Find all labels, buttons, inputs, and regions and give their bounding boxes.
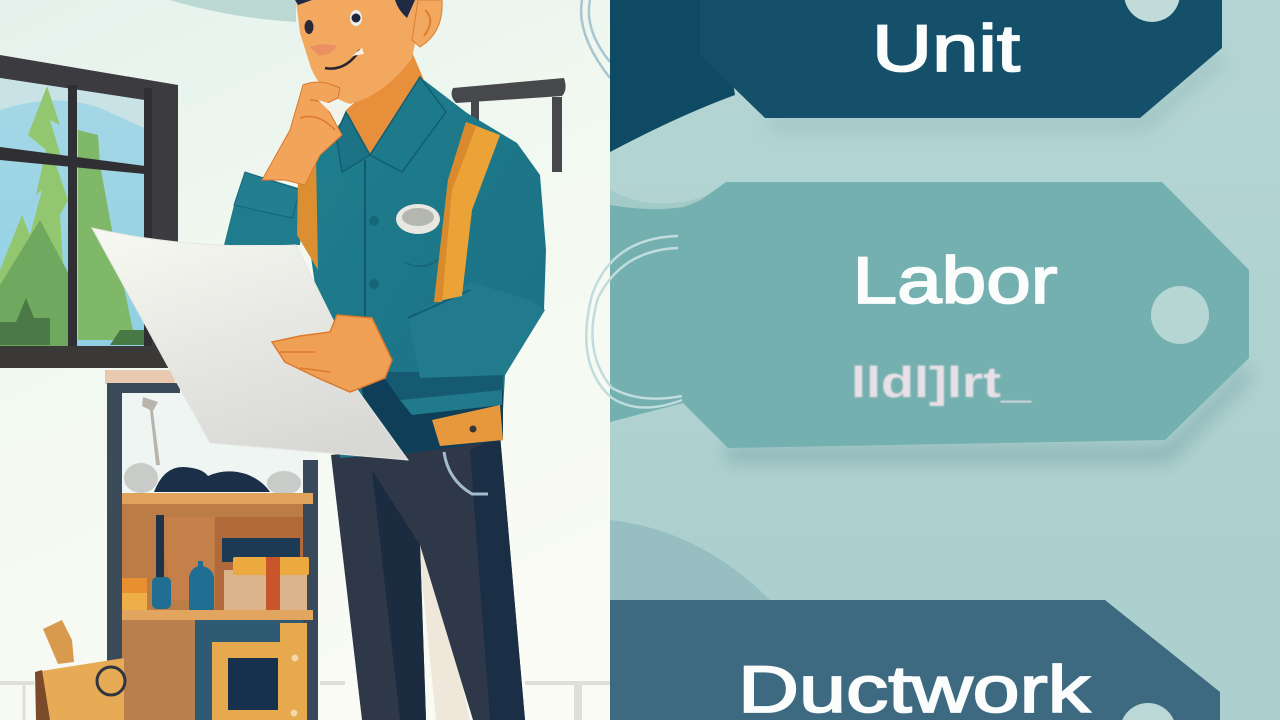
left sleeve [224,172,305,245]
right sleeve fold [408,282,545,378]
suspenders [297,122,500,302]
lower hand [272,315,392,392]
unit tag hole [1125,0,1179,22]
back leg gap [418,540,470,720]
name badge [396,204,440,234]
ductwork tag hole [1122,703,1174,720]
panel: technician figure [92,0,546,720]
panel: price tags [586,0,1280,720]
rope: top right of wall [581,0,610,78]
labor tag: Labor [852,243,1058,317]
icon: wall stool [452,78,566,172]
belt pouch [432,405,503,446]
unit tag [610,0,1222,152]
rope loop [586,236,682,408]
baseboard [0,683,610,720]
trousers [331,435,525,720]
icon: window with pine trees [0,55,178,368]
unit tag: Unit [872,11,1020,85]
labor tag [586,182,1249,462]
raised hand [262,82,345,185]
head and neck [295,0,446,172]
icon: yellow tool [35,620,125,720]
shirt collar [336,77,446,172]
paper sheet [92,228,408,460]
labor tag: lldl]lrt_ [851,358,1032,407]
ductwork tag [610,600,1220,720]
placket [364,160,366,335]
panel: room illustration [0,0,610,720]
shirt body [224,77,546,458]
shelving unit [105,370,318,720]
